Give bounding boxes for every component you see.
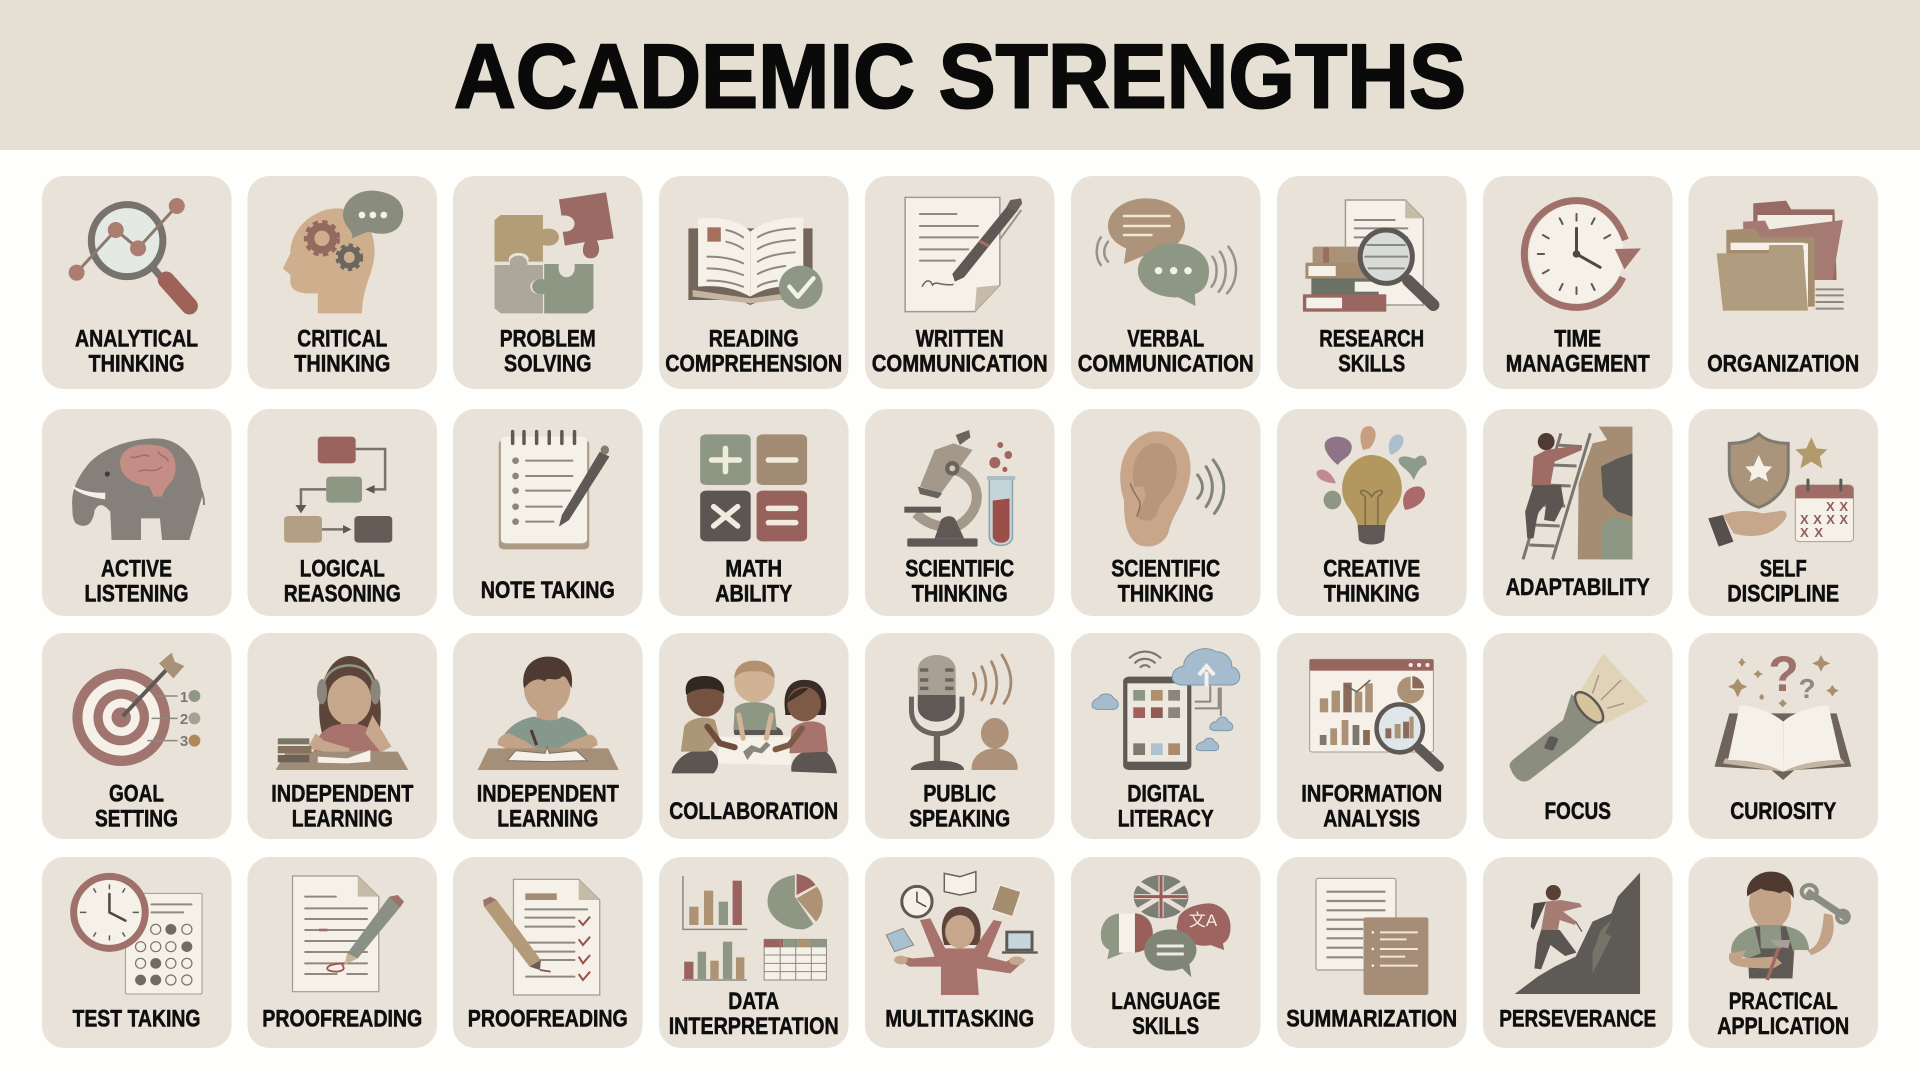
- label: ANALYSIS: [1323, 806, 1420, 833]
- icon: worker with wrench and hammer: [1729, 872, 1849, 980]
- icon: document and summary sheet: [1316, 878, 1428, 995]
- panel: public speaking: [865, 633, 1054, 839]
- panel: curiosity: [1688, 633, 1878, 839]
- panel: multitasking: [865, 857, 1054, 1048]
- label: ACTIVE: [101, 556, 172, 583]
- panel: goal setting: [42, 633, 232, 839]
- label: LITERACY: [1118, 806, 1214, 833]
- label: GOAL: [109, 781, 164, 808]
- label: [1323, 556, 1420, 608]
- label: [665, 326, 842, 378]
- panel: collaboration: [659, 633, 848, 839]
- icon: elephant with brain: [69, 438, 204, 540]
- label: THINKING: [912, 581, 1008, 608]
- panel: data interpretation: [659, 857, 848, 1048]
- icon: document with sage pencil: [293, 876, 404, 992]
- panel: analytical thinking: [42, 176, 232, 389]
- panel: perseverance: [1483, 857, 1672, 1048]
- label: VERBAL: [1127, 326, 1204, 353]
- panel: scientific thinking ear: [1071, 409, 1260, 616]
- label: [95, 781, 178, 833]
- label: SKILLS: [1338, 351, 1405, 378]
- label: THINKING: [1324, 581, 1420, 608]
- label: PUBLIC: [923, 781, 996, 808]
- icon: clock with arrow: [1524, 201, 1641, 307]
- label: NOTE TAKING: [481, 577, 615, 604]
- icon: boy writing at desk: [478, 657, 619, 770]
- label: [669, 988, 839, 1040]
- icon: magnifier over line chart: [69, 198, 189, 306]
- icon: open book with check badge: [688, 218, 823, 309]
- panel: note taking: [453, 409, 642, 616]
- panel: information analysis: [1277, 633, 1466, 839]
- label: PROOFREADING: [468, 1006, 628, 1033]
- label: [905, 556, 1014, 608]
- panel: summarization: [1277, 857, 1466, 1048]
- label: SUMMARIZATION: [1286, 1006, 1457, 1033]
- label: [84, 556, 188, 608]
- label: [294, 326, 390, 378]
- panel: scientific thinking microscope: [865, 409, 1054, 616]
- icon: target with arrow and numbered steps: [72, 653, 200, 766]
- label: [500, 326, 596, 378]
- panel: language skills: [1071, 857, 1260, 1048]
- label: [1118, 781, 1214, 833]
- icon: language speech bubbles: [1101, 875, 1230, 977]
- label: DISCIPLINE: [1727, 581, 1839, 608]
- icon: checklist with tan pencil: [483, 879, 600, 995]
- question mark small: ?: [1798, 673, 1816, 704]
- icon: math symbols grid: [700, 434, 807, 541]
- label: INTERPRETATION: [669, 1013, 839, 1040]
- label: [1301, 781, 1442, 833]
- icon: climber on mountain: [1515, 873, 1640, 994]
- icon: page with pen: [905, 197, 1022, 312]
- icon: notepad and pen: [499, 432, 609, 549]
- icon: head with gears and speech cloud: [283, 191, 403, 313]
- label: CRITICAL: [297, 326, 387, 353]
- panel: digital literacy: [1071, 633, 1260, 839]
- label: [1717, 988, 1849, 1040]
- label: THINKING: [88, 351, 184, 378]
- icon: dashboard window with magnifier: [1310, 659, 1439, 767]
- label: ANALYTICAL: [75, 326, 198, 353]
- icon: tablet, clouds and wifi: [1092, 649, 1240, 770]
- label: PRACTICAL: [1729, 988, 1838, 1015]
- label: TIME: [1554, 326, 1601, 353]
- label: COMPREHENSION: [665, 351, 842, 378]
- label: LOGICAL: [300, 556, 385, 583]
- label: SCIENTIFIC: [1111, 556, 1220, 583]
- panel: problem solving: [453, 176, 642, 389]
- icon: ear with sound waves: [1120, 431, 1224, 546]
- label: SCIENTIFIC: [905, 556, 1014, 583]
- panel: self discipline: [1688, 409, 1878, 616]
- label: [1319, 326, 1424, 378]
- label: COLLABORATION: [669, 798, 838, 825]
- panel: critical thinking: [248, 176, 437, 389]
- icon: folders: [1717, 201, 1843, 311]
- label: SOLVING: [504, 351, 592, 378]
- icon: person climbing ladder on wall: [1523, 427, 1632, 559]
- icon: books, document and magnifier: [1303, 200, 1433, 312]
- icon: light bulb with paint blobs: [1317, 426, 1427, 544]
- label: CURIOSITY: [1730, 798, 1836, 825]
- icon: microphone and speaker: [911, 655, 1018, 770]
- label: SPEAKING: [909, 806, 1010, 833]
- header band: [0, 0, 1920, 150]
- panel: focus: [1483, 633, 1672, 839]
- label: PROBLEM: [500, 326, 596, 353]
- label: ABILITY: [715, 581, 792, 608]
- panel: time management: [1483, 176, 1672, 389]
- label: INDEPENDENT: [477, 781, 619, 808]
- label: RESEARCH: [1319, 326, 1424, 353]
- label: [1111, 556, 1220, 608]
- label: [284, 556, 401, 608]
- icon: shield, star, hand and calendar: [1708, 434, 1853, 547]
- question mark large: ?: [1768, 646, 1799, 702]
- label: APPLICATION: [1717, 1013, 1849, 1040]
- icon: charts and table: [682, 874, 826, 980]
- label: MULTITASKING: [885, 1006, 1034, 1033]
- label: [477, 781, 619, 833]
- panel: verbal communication: [1071, 176, 1260, 389]
- icon: girl with headphones studying: [276, 656, 408, 770]
- label: [909, 781, 1010, 833]
- label: PROOFREADING: [262, 1006, 422, 1033]
- label: DIGITAL: [1127, 781, 1204, 808]
- label: COMMUNICATION: [872, 351, 1048, 378]
- icon: flow chart: [284, 437, 392, 543]
- icon: three children working together: [672, 661, 837, 773]
- label: FOCUS: [1544, 798, 1611, 825]
- label: MANAGEMENT: [1506, 351, 1650, 378]
- icon: open book with sparkles: [1715, 655, 1851, 780]
- label: SELF: [1760, 556, 1807, 583]
- label: LISTENING: [84, 581, 188, 608]
- panel: creative thinking: [1277, 409, 1466, 616]
- panel: logical reasoning: [248, 409, 437, 616]
- step number 2: 2: [180, 711, 188, 728]
- label: LEARNING: [497, 806, 598, 833]
- label: READING: [709, 326, 799, 353]
- calendar marks row three: XX: [1800, 525, 1823, 540]
- calendar marks row one: XX: [1826, 499, 1848, 514]
- panel: proofreading pencil: [248, 857, 437, 1048]
- label: [1506, 326, 1650, 378]
- label: PERSEVERANCE: [1499, 1006, 1656, 1033]
- label: THINKING: [294, 351, 390, 378]
- label: LEARNING: [292, 806, 393, 833]
- label: LANGUAGE: [1111, 988, 1220, 1015]
- panel: independent learning boy: [453, 633, 642, 839]
- label: ADAPTABILITY: [1506, 574, 1650, 601]
- panel: practical application: [1688, 857, 1878, 1048]
- label: [1727, 556, 1839, 608]
- panel: research skills: [1277, 176, 1466, 389]
- label: INDEPENDENT: [271, 781, 413, 808]
- icon: flashlight: [1510, 653, 1648, 782]
- step number 1: 1: [180, 689, 188, 706]
- label: INFORMATION: [1301, 781, 1442, 808]
- icon: clock and answer sheet: [74, 876, 202, 994]
- icon: microscope and test tube: [904, 430, 1015, 547]
- label: REASONING: [284, 581, 401, 608]
- label: [1078, 326, 1254, 378]
- label: [75, 326, 198, 378]
- label: [872, 326, 1048, 378]
- panel: organization: [1688, 176, 1878, 389]
- label: [1111, 988, 1220, 1040]
- calendar marks row two: XXXX: [1800, 512, 1848, 527]
- label: COMMUNICATION: [1078, 351, 1254, 378]
- title: ACADEMIC STRENGTHS: [454, 26, 1466, 128]
- panel: proofreading checklist: [453, 857, 642, 1048]
- translate glyphs: 文A: [1189, 911, 1218, 930]
- label: SETTING: [95, 806, 178, 833]
- panel: adaptability: [1483, 409, 1672, 616]
- label: [271, 781, 413, 833]
- panel: reading comprehension: [659, 176, 848, 389]
- panel: independent learning girl: [248, 633, 437, 839]
- label: SKILLS: [1132, 1013, 1199, 1040]
- label: WRITTEN: [916, 326, 1004, 353]
- label: MATH: [725, 556, 782, 583]
- label: CREATIVE: [1323, 556, 1420, 583]
- icon: puzzle pieces: [495, 192, 614, 313]
- label: THINKING: [1118, 581, 1214, 608]
- panel: test taking: [42, 857, 232, 1048]
- label: DATA: [728, 988, 779, 1015]
- panel: active listening: [42, 409, 232, 616]
- label: TEST TAKING: [72, 1006, 200, 1033]
- panel: written communication: [865, 176, 1054, 389]
- step number 3: 3: [180, 733, 188, 750]
- icon: person juggling objects: [886, 872, 1038, 995]
- panel: math ability: [659, 409, 848, 616]
- label: [715, 556, 792, 608]
- icon: speech bubbles with sound waves: [1097, 198, 1236, 306]
- label: ORGANIZATION: [1707, 351, 1859, 378]
